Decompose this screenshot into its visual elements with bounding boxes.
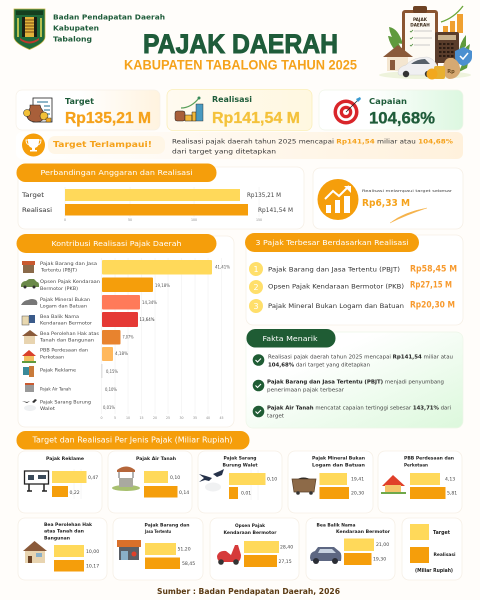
bar chart: target vs realisasi: Realisasi bbox=[22, 206, 52, 214]
category labels: Pajak Mineral Bukan bbox=[40, 297, 90, 303]
panel: capaian card: Capaian bbox=[369, 97, 407, 106]
illustration: clipboard, calculator, house, car and coins: Rp bbox=[447, 69, 455, 75]
bar chart: target vs realisasi: 0 bbox=[64, 218, 66, 222]
horizontal bar chart: contribution: 0,01% bbox=[103, 405, 116, 411]
ranking rows: Pajak Barang dan Jasa Tertentu (PBJT) bbox=[268, 266, 400, 274]
bar chart: target vs realisasi: Rp135,21 M bbox=[247, 192, 281, 199]
ranking rows: Rp27,15 M bbox=[410, 280, 452, 290]
card: bea perolehan hak atas tanah dan bangunan: 10,00 bbox=[86, 549, 99, 555]
horizontal bar chart: contribution: 25 bbox=[166, 416, 170, 420]
card: opsen pajak kendaraan bermotor: Opsen Pajak bbox=[235, 523, 266, 529]
card: pajak mineral bukan logam dan batuan: 19,41 bbox=[351, 476, 364, 482]
card: pajak barang dan jasa tertentu: 58,45 bbox=[182, 561, 195, 567]
horizontal bar chart: contribution: 10 bbox=[126, 416, 130, 420]
card: opsen pajak kendaraan bermotor: 28,40 bbox=[280, 544, 293, 550]
card: bea balik nama kendaraan bermotor: Bea Balik Nama bbox=[316, 522, 356, 528]
text: banner description bbox=[172, 138, 453, 156]
panel: target card: Rp135,21 M bbox=[65, 110, 151, 127]
category labels: Bea Perolehan Hak atas bbox=[40, 331, 100, 337]
panel: kontribusi realisasi pajak daerah bbox=[16, 234, 234, 427]
card: pbb perdesaan dan perkotaan: 4,13 bbox=[445, 476, 455, 482]
legend bbox=[402, 518, 462, 580]
card: pajak sarang burung walet: 0,01 bbox=[241, 490, 251, 496]
legend: Target bbox=[433, 530, 451, 536]
card: pbb perdesaan dan perkotaan bbox=[378, 451, 462, 513]
card: pbb perdesaan dan perkotaan: Perkotaan bbox=[404, 462, 428, 468]
heading pill bbox=[16, 164, 216, 182]
logo: Kabupaten Tabalong crest bbox=[14, 9, 45, 50]
icon: well bbox=[112, 466, 140, 491]
panel: selisih realisasi: Realisasi melampaui target sebesar bbox=[362, 188, 453, 193]
agency name: Kabupaten bbox=[53, 24, 99, 32]
bar chart: target vs realisasi: 50 bbox=[128, 218, 132, 222]
fact text: Pajak Barang dan Jasa Tertentu (PBJT) menjadi penyumbang bbox=[267, 380, 444, 386]
fact text: penerimaan pajak terbesar bbox=[267, 388, 345, 394]
card: pajak air tanah bbox=[108, 451, 192, 513]
fact text: target bbox=[267, 414, 284, 420]
card: pajak sarang burung walet: 0,10 bbox=[267, 476, 277, 482]
card: bea balik nama kendaraan bermotor: Kendaraan Bermotor bbox=[336, 529, 391, 535]
source note: Sumber : Badan Pendapatan Daerah, 2026 bbox=[157, 586, 340, 596]
heading pill: 3 Pajak Terbesar Berdasarkan Realisasi bbox=[256, 239, 409, 247]
icon: billboard bbox=[24, 471, 48, 491]
category labels: PBB Perdesaan dan bbox=[40, 348, 88, 354]
card: bea perolehan hak atas tanah dan bangunan: atas Tanah dan bbox=[44, 528, 84, 534]
icon: coins and rising chart bbox=[175, 96, 203, 121]
card: pajak reklame: Pajak Reklame bbox=[46, 456, 84, 462]
horizontal bar chart: contribution: 15 bbox=[139, 416, 144, 420]
icon: mine cart bbox=[292, 478, 316, 495]
category labels: Bermotor (PKB) bbox=[40, 286, 78, 292]
horizontal bar chart: contribution: 45 bbox=[219, 416, 224, 420]
panel: realisasi card: Realisasi bbox=[212, 95, 252, 104]
category labels: Bea Balik Nama bbox=[40, 314, 79, 320]
ranking rows: Opsen Pajak Kendaraan Bermotor (PKB) bbox=[268, 282, 404, 290]
icon: target with arrow bbox=[334, 97, 361, 124]
card: pajak mineral bukan logam dan batuan: 20,30 bbox=[351, 490, 364, 496]
card: pajak barang dan jasa tertentu bbox=[113, 518, 203, 580]
agency name bbox=[53, 12, 165, 44]
icon: swallows and nest bbox=[199, 469, 224, 492]
horizontal bar chart: contribution: 13,64% bbox=[140, 317, 155, 323]
horizontal bar chart: contribution: 19,18% bbox=[155, 283, 171, 289]
legend: (Miliar Rupiah) bbox=[415, 568, 453, 574]
category labels: Perkotaan bbox=[40, 354, 64, 360]
heading pill bbox=[16, 234, 216, 253]
heading: target dan realisasi per jenis pajak: Target dan Realisasi Per Jenis Pajak (Miliar Rupiah) bbox=[31, 436, 233, 444]
card: pajak barang dan jasa tertentu: Pajak Barang dan bbox=[144, 522, 190, 528]
panel: realisasi card bbox=[167, 90, 312, 130]
card: pbb perdesaan dan perkotaan: PBB Perdesaan dan bbox=[404, 456, 454, 462]
horizontal bar chart: contribution: 30 bbox=[179, 416, 184, 420]
bar chart: target vs realisasi: Target bbox=[21, 191, 44, 199]
card: pajak sarang burung walet bbox=[198, 451, 282, 513]
category labels: Pajak Barang dan Jasa bbox=[40, 261, 97, 267]
bar chart: target vs realisasi: 150 bbox=[256, 218, 262, 222]
category labels: Opsen Pajak Kendaraan bbox=[40, 279, 100, 285]
card: pajak barang dan jasa tertentu: 51,20 bbox=[178, 546, 191, 552]
heading pill: Fakta Menarik bbox=[262, 334, 318, 343]
title: PAJAK DAERAH bbox=[143, 29, 338, 59]
card: pajak sarang burung walet: Pajak Sarang bbox=[224, 456, 256, 462]
panel: realisasi card: Rp141,54 M bbox=[212, 110, 300, 127]
horizontal bar chart: contribution: 5 bbox=[114, 416, 116, 420]
icon: house bbox=[23, 541, 47, 563]
category labels: Pajak Air Tanah bbox=[40, 386, 71, 392]
category labels: Logam dan Batuan bbox=[40, 304, 87, 310]
horizontal bar chart: contribution: 41,41% bbox=[215, 264, 231, 270]
card: bea balik nama kendaraan bermotor: 21,00 bbox=[376, 542, 389, 548]
horizontal bar chart: contribution: 20 bbox=[153, 416, 157, 420]
ranking rows: Rp20,30 M bbox=[410, 300, 455, 310]
horizontal bar chart: contribution bbox=[100, 258, 231, 420]
fact text: 104,68% dari target yang ditetapkan bbox=[268, 362, 370, 368]
card: pajak mineral bukan logam dan batuan bbox=[288, 451, 373, 513]
ranking rows: 1 bbox=[253, 265, 259, 274]
icon: red roof house bbox=[381, 475, 406, 494]
category labels: Tanah dan Bangunan bbox=[39, 338, 94, 344]
category labels: Pajak Sarang Burung bbox=[40, 400, 91, 406]
text: banner description: Realisasi pajak daerah tahun 2025 mencapai Rp141,54 miliar atau 104,68% bbox=[172, 138, 453, 146]
text: banner description: dari target yang ditetapkan bbox=[172, 148, 276, 156]
card: bea perolehan hak atas tanah dan bangunan: Bangunan bbox=[44, 536, 70, 542]
illustration: clipboard, calculator, house, car and coins: DAERAH bbox=[410, 22, 430, 28]
card: pajak mineral bukan logam dan batuan: Pajak Mineral Bukan bbox=[312, 456, 365, 462]
ranking rows bbox=[249, 262, 457, 313]
ranking rows: Pajak Mineral Bukan Logam dan Batuan bbox=[268, 302, 404, 310]
horizontal bar chart: contribution: 4,18% bbox=[115, 351, 129, 357]
card: pajak sarang burung walet: Burung Walet bbox=[222, 462, 258, 468]
horizontal bar chart: contribution: 0,15% bbox=[106, 369, 119, 375]
card: bea perolehan hak atas tanah dan bangunan: Bea Perolehan Hak bbox=[44, 522, 93, 528]
ranking rows: 2 bbox=[253, 283, 259, 292]
category labels: Tertentu (PBJT) bbox=[40, 268, 77, 274]
legend: Realisasi bbox=[434, 552, 456, 558]
card: opsen pajak kendaraan bermotor: Kendaraan Bermotor bbox=[224, 530, 277, 536]
card: pajak barang dan jasa tertentu: Jasa Tertentu bbox=[144, 529, 171, 535]
icon: money bag and document bbox=[24, 98, 52, 122]
panel: capaian card: 104,68% bbox=[369, 110, 435, 128]
banner: target terlampaui bbox=[16, 132, 463, 159]
card: pajak reklame: 0,47 bbox=[88, 475, 98, 481]
panel: 3 pajak terbesar bbox=[245, 233, 463, 325]
heading: target dan realisasi per jenis pajak bbox=[16, 431, 250, 450]
ranking rows: Rp58,45 M bbox=[410, 264, 457, 274]
card: bea balik nama kendaraan bermotor bbox=[306, 518, 395, 580]
agency name: Badan Pendapatan Daerah bbox=[53, 12, 165, 22]
card: bea perolehan hak atas tanah dan bangunan: 10,17 bbox=[86, 564, 99, 570]
card: pajak air tanah: Pajak Air Tanah bbox=[136, 456, 176, 462]
icon: red scooter bbox=[217, 545, 241, 565]
icon: growth chart circle bbox=[318, 179, 358, 220]
bar chart: target vs realisasi bbox=[21, 187, 293, 222]
card: pajak mineral bukan logam dan batuan: Logam dan Batuan bbox=[312, 462, 365, 468]
card: bea perolehan hak atas tanah dan bangunan bbox=[18, 518, 107, 580]
category labels: Kendaraan Bermotor bbox=[40, 320, 92, 326]
card: pbb perdesaan dan perkotaan: 5,81 bbox=[447, 490, 457, 496]
card: bea balik nama kendaraan bermotor: 19,30 bbox=[373, 556, 386, 562]
icon: grey car bbox=[310, 547, 341, 564]
fact text: Pajak Air Tanah mencatat capaian tertinggi sebesar 143,71% dari bbox=[267, 406, 451, 412]
panel: target card bbox=[16, 90, 160, 130]
banner: target terlampaui: Target Terlampaui! bbox=[53, 139, 152, 149]
category labels bbox=[39, 261, 100, 412]
horizontal bar chart: contribution: 40 bbox=[206, 416, 210, 420]
panel: selisih realisasi: Rp6,33 M bbox=[362, 198, 410, 209]
card: pajak air tanah: 0,14 bbox=[179, 490, 189, 496]
card: pajak air tanah: 0,10 bbox=[170, 475, 180, 481]
category labels: Walet bbox=[40, 406, 55, 412]
icon: shop bbox=[117, 540, 141, 560]
horizontal bar chart: contribution: 0,10% bbox=[105, 387, 118, 393]
horizontal bar chart: contribution: 7,07% bbox=[122, 334, 134, 340]
agency name: Tabalong bbox=[53, 34, 92, 44]
category icons bbox=[21, 261, 39, 411]
heading pill bbox=[245, 233, 419, 252]
icon: trophy bbox=[22, 134, 45, 156]
horizontal bar chart: contribution: 35 bbox=[193, 416, 197, 420]
horizontal bar chart: contribution: 0 bbox=[100, 416, 103, 420]
category labels: Pajak Reklame bbox=[40, 368, 76, 374]
card: opsen pajak kendaraan bermotor bbox=[210, 518, 299, 580]
panel: target card: Target bbox=[65, 97, 94, 106]
card: pajak reklame: 0,22 bbox=[70, 490, 80, 496]
subtitle: KABUPATEN TABALONG TAHUN 2025 bbox=[124, 58, 357, 72]
illustration: clipboard, calculator, house, car and coins: PAJAK bbox=[413, 17, 428, 22]
card: pajak reklame bbox=[18, 451, 102, 513]
ranking rows: 3 bbox=[253, 302, 259, 311]
panel: perbandingan anggaran dan realisasi bbox=[16, 164, 304, 229]
panel: capaian card bbox=[319, 90, 463, 130]
panel: fakta menarik bbox=[246, 329, 463, 428]
illustration: clipboard, calculator, house, car and coins bbox=[379, 6, 472, 80]
check icons bbox=[253, 354, 264, 417]
heading pill bbox=[246, 329, 336, 348]
card: opsen pajak kendaraan bermotor: 27,15 bbox=[278, 559, 292, 565]
fact text bbox=[267, 354, 453, 420]
bar chart: target vs realisasi: 100 bbox=[191, 218, 197, 222]
heading pill: Perbandingan Anggaran dan Realisasi bbox=[40, 169, 193, 177]
horizontal bar chart: contribution: 14,34% bbox=[142, 300, 158, 306]
heading pill: Kontribusi Realisasi Pajak Daerah bbox=[52, 240, 182, 248]
bar chart: target vs realisasi: Rp141,54 M bbox=[258, 207, 293, 214]
fact text: Realisasi pajak daerah tahun 2025 mencapai Rp141,54 miliar atau bbox=[268, 354, 453, 360]
panel: selisih realisasi bbox=[313, 168, 463, 229]
